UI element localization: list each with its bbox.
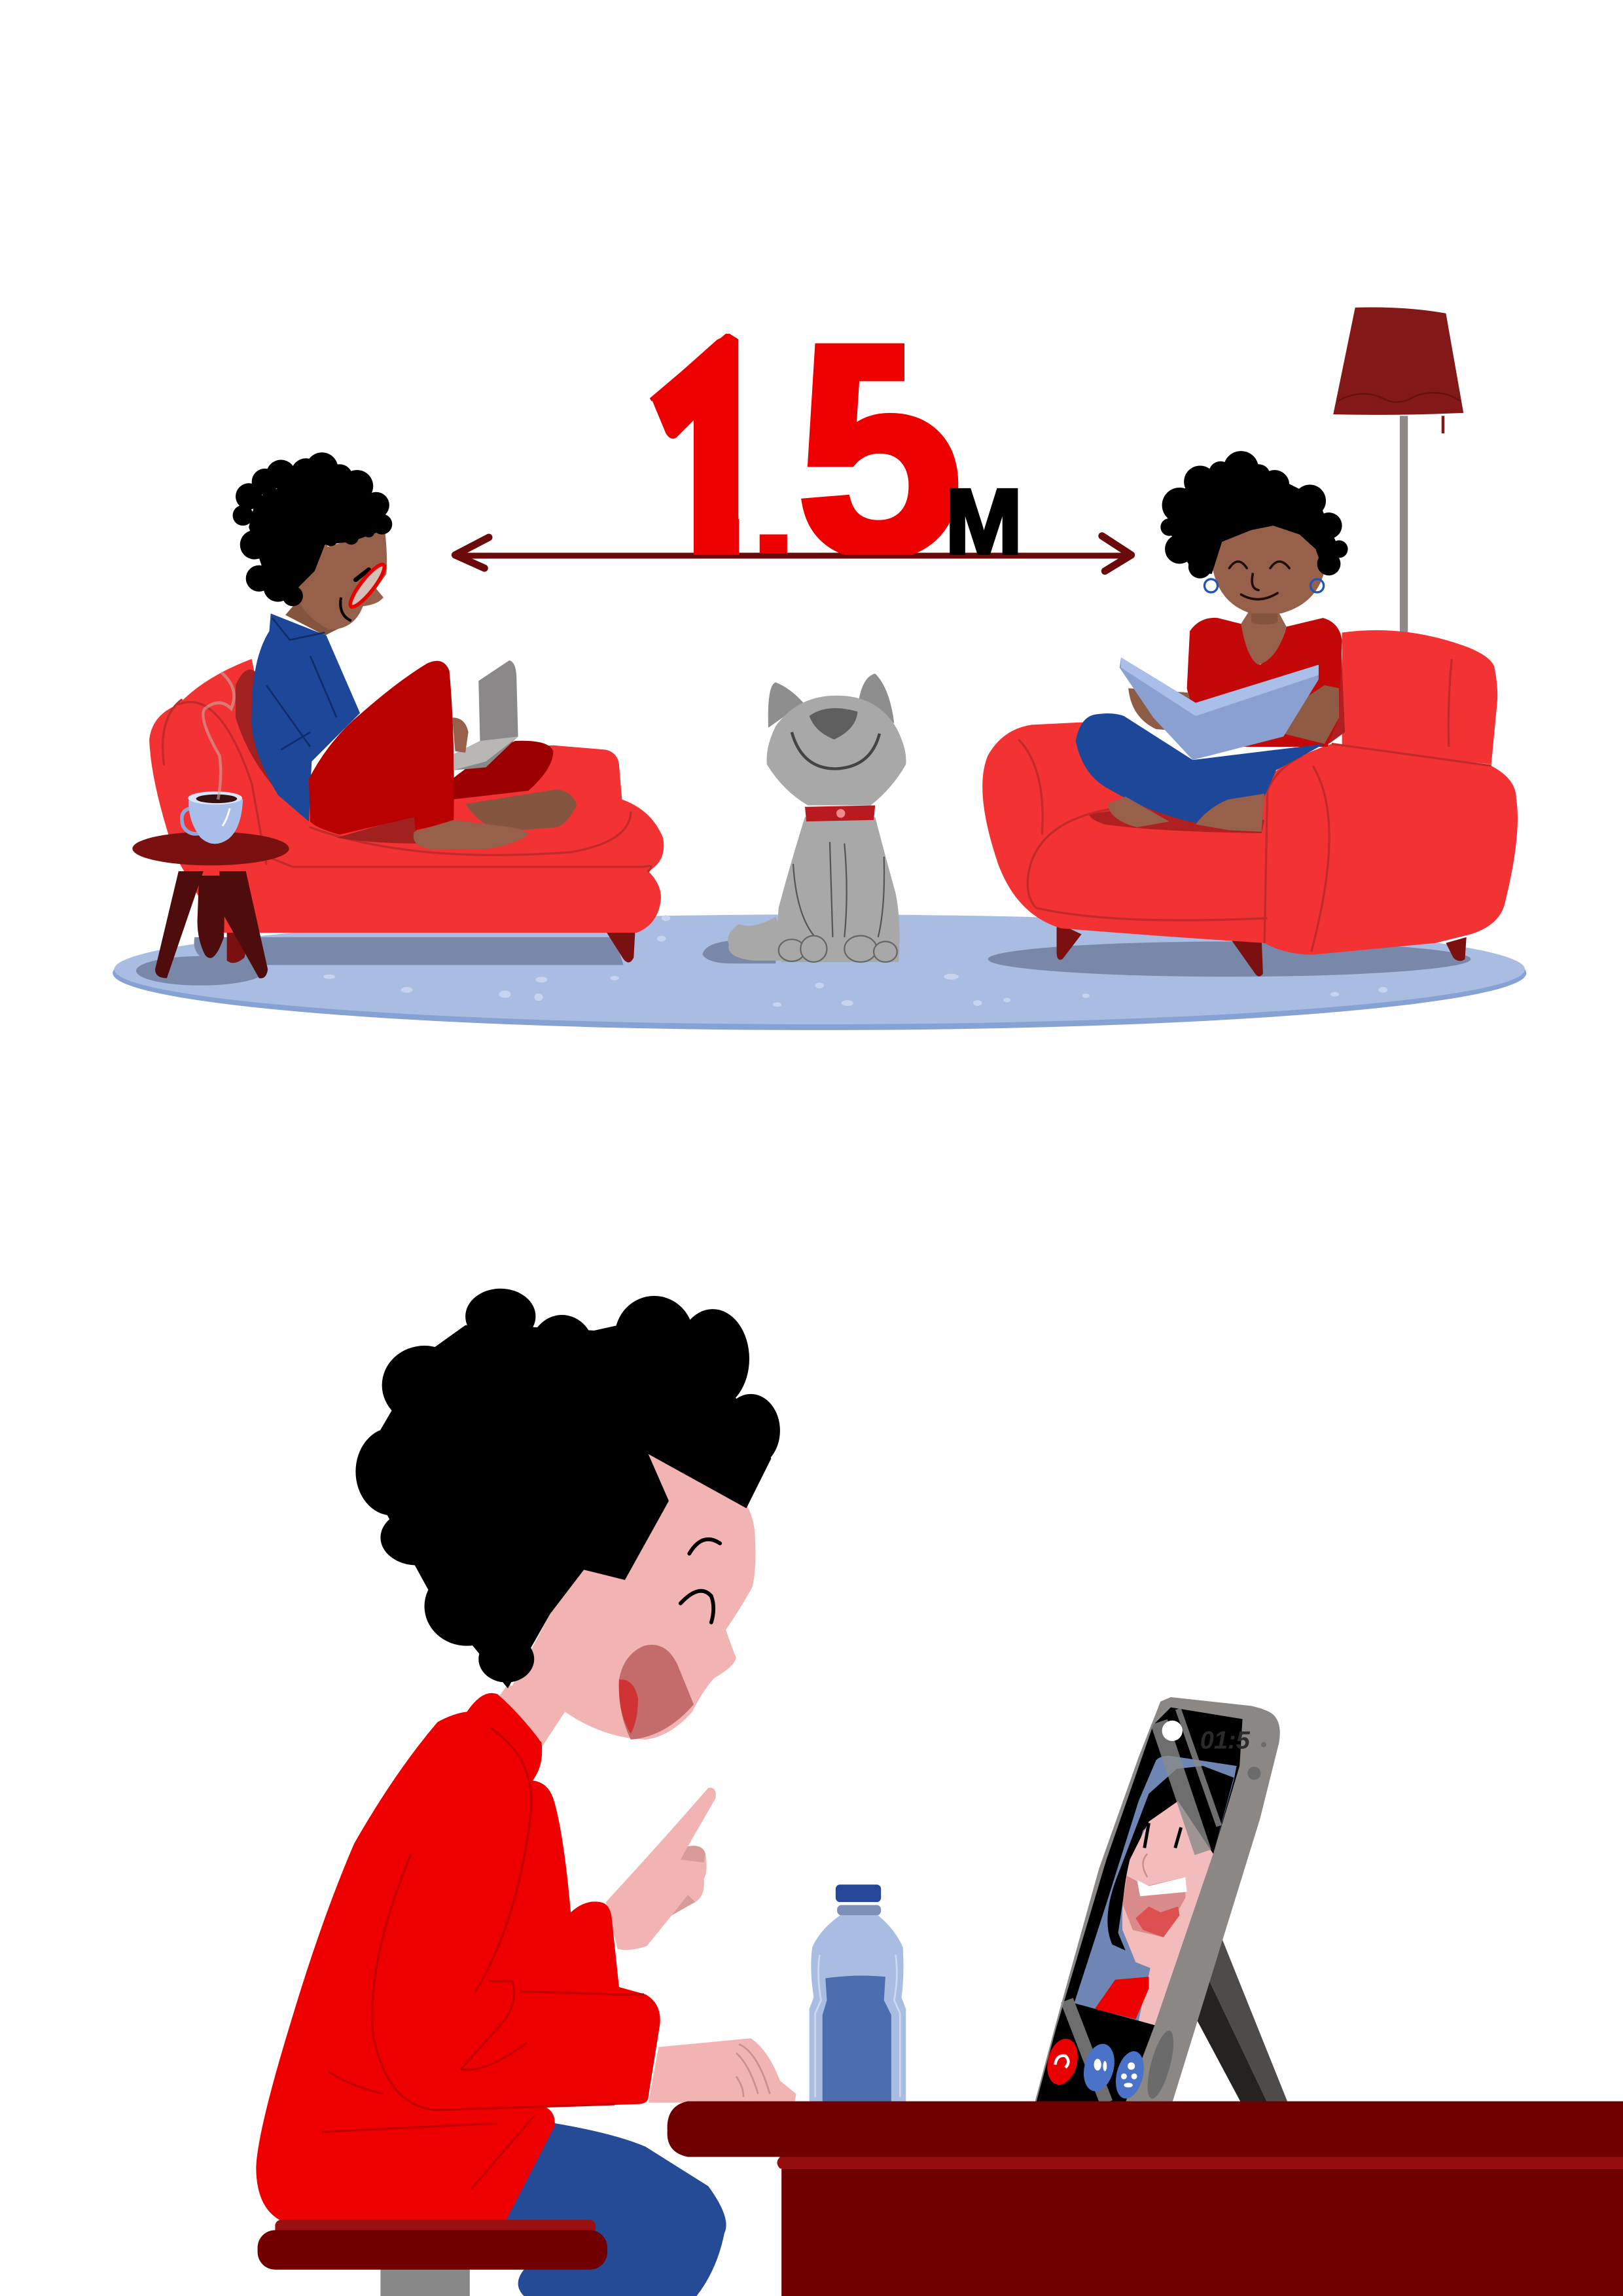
jeans [503, 2123, 726, 2296]
hair [233, 452, 392, 606]
rug [113, 914, 1526, 1030]
chair seams [1018, 740, 1491, 952]
shirt [1187, 618, 1342, 747]
phone stand [1196, 1939, 1288, 2103]
sweater [256, 1693, 660, 2223]
chaise sofa [149, 659, 664, 963]
scene: living room at 1.5 m distance [113, 268, 1526, 1030]
neck [497, 1684, 565, 1750]
phone case [1035, 1697, 1280, 2103]
decimal point: . [746, 439, 800, 581]
near leg [309, 661, 454, 834]
cat [728, 673, 906, 962]
smile [340, 598, 351, 621]
distance arrow [455, 536, 1132, 571]
head [233, 452, 392, 630]
scene: video call at a desk [256, 1289, 1623, 2296]
shirt [251, 613, 360, 821]
eyes [681, 1539, 720, 1623]
caller hair [1107, 1766, 1234, 1950]
hand [452, 717, 469, 753]
neckline skin [1241, 607, 1287, 665]
bottle body [810, 1915, 906, 2103]
shirt creases [266, 618, 336, 749]
seat shadow [1089, 802, 1264, 833]
man on sofa [233, 452, 577, 850]
finger lines [736, 2044, 770, 2097]
laptop [454, 660, 518, 770]
lamp shade [1333, 307, 1463, 415]
backrest shadow [236, 670, 284, 798]
caller nose [1143, 1854, 1147, 1877]
sweater folds [322, 1728, 644, 2189]
near foot [414, 820, 528, 850]
far leg [452, 741, 553, 800]
water [823, 1975, 891, 2103]
body lines [793, 842, 884, 937]
eyes and smile [1229, 562, 1289, 600]
sofa far leg [606, 931, 635, 962]
cord [1442, 416, 1444, 433]
armchair [982, 630, 1518, 977]
nose [810, 708, 857, 740]
sofa body [149, 659, 664, 933]
neck [285, 583, 351, 636]
chair body [982, 722, 1518, 955]
bottle highlights [815, 1955, 900, 2097]
girl with red sweater [256, 1289, 796, 2223]
hand on table [649, 2038, 796, 2103]
stool [258, 2220, 607, 2296]
ear [302, 536, 328, 562]
call buttons [1043, 2036, 1149, 2102]
screen glare bands [1067, 1709, 1219, 2103]
timer: 01:5 [1200, 1727, 1251, 1754]
woman reading [1076, 451, 1348, 832]
hair [355, 1289, 780, 1689]
cat head [767, 696, 906, 805]
ears [768, 673, 894, 728]
digit 5: 5 [796, 283, 963, 618]
phone buttons [1142, 1742, 1266, 2101]
unit m: M [946, 470, 1022, 573]
steam [203, 672, 234, 800]
tail [728, 917, 791, 961]
sofa stitching [163, 700, 651, 871]
camera [1162, 1721, 1183, 1741]
photo background [1074, 1755, 1237, 2025]
screen [1036, 1708, 1243, 2103]
caller shirt [1095, 1977, 1149, 2019]
face [509, 1454, 755, 1741]
ear [530, 1517, 585, 1602]
desk [668, 2101, 1623, 2296]
side table [132, 832, 289, 978]
chair legs [1057, 922, 1467, 977]
table legs [155, 871, 268, 978]
eye [355, 569, 369, 580]
digit 1 flag stroke [651, 337, 732, 439]
sofa leg [227, 925, 252, 963]
feet [1108, 794, 1264, 832]
pointing hand [606, 1787, 716, 1950]
glasses [346, 561, 389, 611]
table top [132, 832, 289, 865]
arms [1128, 685, 1339, 744]
caller eyes [1145, 1823, 1181, 1848]
book [1120, 658, 1319, 760]
caller face [1122, 1801, 1213, 2025]
caller mouth [1122, 1876, 1187, 1937]
phone [1035, 1697, 1280, 2103]
mouth [619, 1645, 694, 1740]
floor lamp [1333, 307, 1463, 632]
smile [792, 732, 880, 769]
hair [1160, 451, 1348, 579]
water bottle [810, 1884, 906, 2103]
cap [836, 1884, 881, 1902]
collar [805, 805, 875, 821]
chair back [1342, 630, 1497, 764]
coffee cup [182, 672, 243, 844]
distance label 1.5 m [650, 334, 1018, 555]
head [1160, 451, 1348, 624]
paws [779, 936, 897, 962]
cushion shadow [336, 813, 469, 844]
jeans [1076, 713, 1325, 823]
torso shadow [1329, 632, 1345, 744]
far foot [465, 789, 577, 832]
pole [1400, 416, 1408, 632]
ring [837, 1905, 881, 1915]
floor shadows [136, 937, 1471, 986]
body [777, 817, 900, 962]
earrings [1204, 579, 1218, 592]
digit 1: 1 [619, 268, 795, 621]
